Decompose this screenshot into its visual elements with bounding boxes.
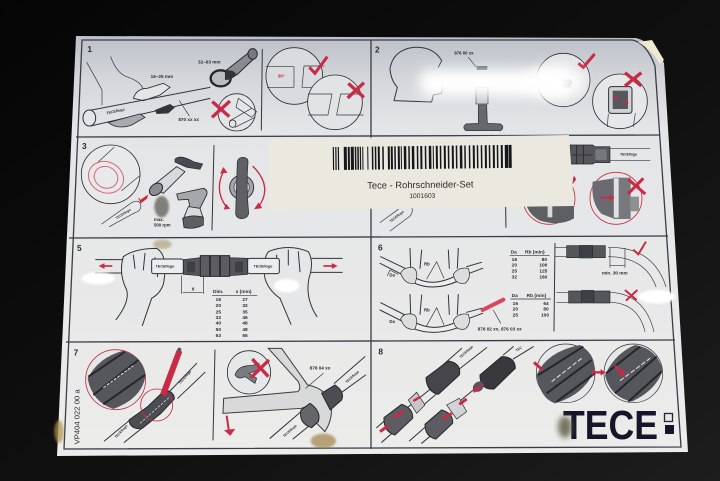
icon: correct 90 degree cut: 90°: [278, 73, 285, 78]
peeled corner of sheet: [638, 40, 664, 64]
panel 6: bending radii: [378, 242, 675, 332]
table: insertion depths: 46: [242, 315, 248, 321]
label: 876 xx xx: [178, 101, 199, 122]
table: radii with support: 32: [512, 275, 517, 281]
table: radii without support: Rb (min): [527, 293, 547, 299]
icon: hands holding cutter on pipe: [83, 57, 210, 127]
table: insertion depths: 55: [242, 333, 248, 339]
icon: hands bending pipe with spring: Rb: [424, 308, 430, 313]
panel 7: tightening: [54, 348, 366, 448]
icon: pipe with fitting: [96, 256, 342, 276]
icon: correct insertion circle: [523, 172, 576, 224]
icon: pipe end with seal rings: [81, 145, 140, 204]
icon: hands bending pipe with spring: [380, 294, 503, 332]
icon: correct bend after fitting: [555, 242, 666, 287]
document code: VP404 022 00 a: [73, 389, 82, 444]
icon: left hand: [116, 248, 165, 326]
icon: fitting being loosened: TECEflogo: [459, 345, 474, 359]
table: insertion depths: 25: [216, 309, 221, 315]
panel 1: cutting the pipe: [83, 44, 364, 131]
table: insertion depths: 35: [242, 309, 248, 315]
dimension x: [182, 276, 204, 294]
icon: fitting on pipe: TECEflogo: [620, 153, 637, 157]
label: 876 02 xx, 876 03 xx: 876 02 xx, 876 03 xx: [478, 326, 522, 331]
sign: instruction sticker: [54, 36, 688, 456]
icon: wrench on fitting: [223, 348, 366, 439]
divider: [260, 49, 264, 130]
step number 8: 8: [378, 346, 383, 356]
table: insertion depths: 32: [242, 303, 248, 309]
table: radii with support: Da: [511, 249, 517, 255]
table: radii without support: 80: [543, 307, 549, 313]
icon: correct 90 degree cut: [266, 48, 327, 104]
icon: pipe sections with logos: [152, 258, 279, 274]
icon: calibration tool with handle: [147, 157, 203, 198]
icon: T-handle rotation: [219, 157, 265, 219]
label: max. 500 rpm: 500 rpm: [154, 223, 171, 228]
divider: [552, 243, 556, 331]
arrow between circles: [592, 369, 605, 375]
table: radii without support: Da: [512, 293, 518, 299]
icon: wrong slanted cut: [308, 75, 364, 130]
step number 6: 6: [378, 242, 383, 252]
table: radii without support: 20: [513, 307, 518, 313]
icon: fitting being loosened: [377, 345, 487, 442]
step number 1: 1: [87, 44, 92, 54]
icon: hands bending pipe, top: Rb: [424, 262, 430, 267]
icon: hands bending pipe, top: Da: [389, 272, 395, 277]
icon: hands holding cutter on pipe: TECEflogo: [106, 107, 126, 115]
table: insertion depths: 20: [216, 303, 221, 309]
step number 2: 2: [375, 45, 380, 55]
table: radii without support: 100: [541, 313, 549, 319]
icon: downward red arrow: [224, 416, 235, 436]
logo squares: [664, 414, 672, 422]
stain near logo: [558, 416, 572, 438]
table: insertion depths: 48: [242, 327, 248, 333]
icon: hands bending pipe, top: [380, 248, 483, 287]
stain under wrench: [311, 434, 336, 448]
step number 5: 5: [77, 243, 82, 253]
table: insertion depths: 40: [216, 321, 221, 327]
label: 876 04 xx: 876 04 xx: [310, 366, 331, 371]
panel 4: joint check: [380, 145, 650, 231]
stain at top of panel 5: [153, 240, 172, 249]
icon: T-handle tool: [464, 66, 503, 131]
divider: [212, 145, 214, 230]
dimension x: x: [192, 286, 195, 292]
table: radii with support: 20: [512, 263, 517, 269]
icon: pipe end with logo: TECEflogo: [115, 208, 132, 220]
table: radii without support: 64: [543, 301, 549, 307]
panel 8: dismantling: [377, 344, 595, 443]
stain near drill: [154, 196, 169, 217]
icon: red arrow to pipe: [139, 196, 147, 203]
divider: [213, 350, 215, 440]
stain at left edge: [54, 420, 64, 443]
label: 876 04 xx: [306, 366, 331, 388]
label: 876 xx xx: 870 xx xx: [178, 117, 199, 122]
label: 876 00 xx: [454, 51, 476, 67]
icon: pipe tag with logo: TECEflogo: [389, 210, 405, 223]
wordmark: TECE: [563, 402, 658, 448]
label: 16-25 mm: 16–25 mm: [151, 74, 173, 79]
panel 2: deburring / calibrating: [375, 45, 647, 131]
table: insertion depths: 48: [242, 321, 248, 327]
sheet frame grid: [64, 40, 681, 449]
icon: wrench on fitting: TECEflogo: [345, 370, 360, 384]
icon: red arrows outward: [99, 263, 337, 269]
icon: fitting taken apart: [409, 345, 533, 443]
logo: TECE: [563, 402, 674, 448]
label text: article number: 1001603: [409, 193, 436, 200]
table: insertion depths: 63: [216, 333, 221, 339]
icon: cordless drill: [177, 188, 207, 228]
icon: wrench on fitting: TECEflogo: [282, 424, 298, 438]
icon: fitting taken apart: TEC: [515, 345, 523, 353]
table: insertion depths: Dim.: [213, 289, 224, 295]
icon: correct bevel circle: [537, 53, 595, 107]
icon: head profile inspecting: [390, 47, 443, 102]
circle: marking before: [534, 344, 595, 403]
label sheet: [268, 135, 574, 210]
table: radii with support: 125: [539, 269, 548, 275]
icon: wrong bend at fitting: [557, 290, 654, 332]
table: radii with support: 16: [512, 257, 517, 263]
icon: enlarged marking after: [592, 344, 663, 403]
icon: fitting with marker pen: TECEflogo: [178, 370, 192, 385]
panel 3: lubricating and inserting: [81, 141, 265, 230]
panel 5: insertion depth: [77, 240, 342, 339]
table: radii without support: 25: [513, 313, 518, 319]
icon: pipe end with logo: [102, 201, 141, 227]
label: 876 00 xx: 876 00 xx: [454, 51, 474, 56]
glare on hands: [82, 272, 299, 292]
icon: wrong insertion circle: [590, 172, 645, 224]
label: max. 500 rpm: max.: [154, 217, 164, 222]
icon: enlarged fitting marking: [86, 350, 146, 410]
circle: marking after: [604, 344, 663, 403]
icon: large pipe cutter: [211, 49, 257, 86]
icon: pipe tag with logo: [380, 208, 412, 231]
table: radii with support: Rb (min): [525, 249, 545, 255]
table: radii without support: [511, 293, 551, 319]
table: insertion depths: [212, 289, 257, 339]
icon: pipe sections with logos: TECEflogo: [156, 265, 175, 269]
barcode sticker label: [268, 135, 574, 210]
label: min. 30 mm: min. 30 mm: [602, 270, 628, 275]
icon: pipe sections with logos: TECEflogo: [254, 265, 273, 269]
icon: no pliers: [227, 351, 271, 394]
icon: fitting with marker pen: [104, 348, 205, 442]
label text: product name: Tece - Rohrschneider-Set: [367, 178, 474, 191]
table: insertion depths: 16: [216, 297, 221, 303]
table: radii with support: 100: [539, 263, 548, 269]
icon: wrong bevel circle: [593, 73, 647, 129]
sticker sheet: [57, 36, 688, 456]
table: insertion depths: x (mm): [236, 289, 252, 295]
icon: do not use hacksaw: [212, 94, 257, 131]
icon: hands bending pipe with spring: Da: [389, 319, 395, 324]
label: 876 02 xx, 876 03 xx: [478, 310, 522, 331]
glare on right edge: [638, 290, 675, 303]
icon: fitting with marker pen: TECEflogo: [114, 424, 129, 439]
label: max. 500 rpm: [154, 217, 171, 228]
label: 32-63 mm: 32–63 mm: [198, 59, 221, 64]
table: radii with support: 25: [512, 269, 517, 275]
divider: [504, 207, 507, 227]
table: radii with support: 80: [542, 257, 547, 263]
barcode: [333, 145, 512, 170]
table: radii with support: 160: [539, 275, 548, 281]
table: radii without support: 16: [513, 301, 518, 307]
table: insertion depths: 27: [242, 297, 248, 303]
step number 7: 7: [74, 348, 79, 358]
step number 3: 3: [82, 141, 87, 151]
glare: reflection on panel 2: [420, 66, 585, 98]
table: insertion depths: 32: [216, 315, 221, 321]
table: insertion depths: 50: [216, 327, 221, 333]
table: radii with support: [510, 249, 549, 281]
icon: fitting on pipe: [570, 145, 650, 164]
icon: right hand: [264, 247, 317, 324]
